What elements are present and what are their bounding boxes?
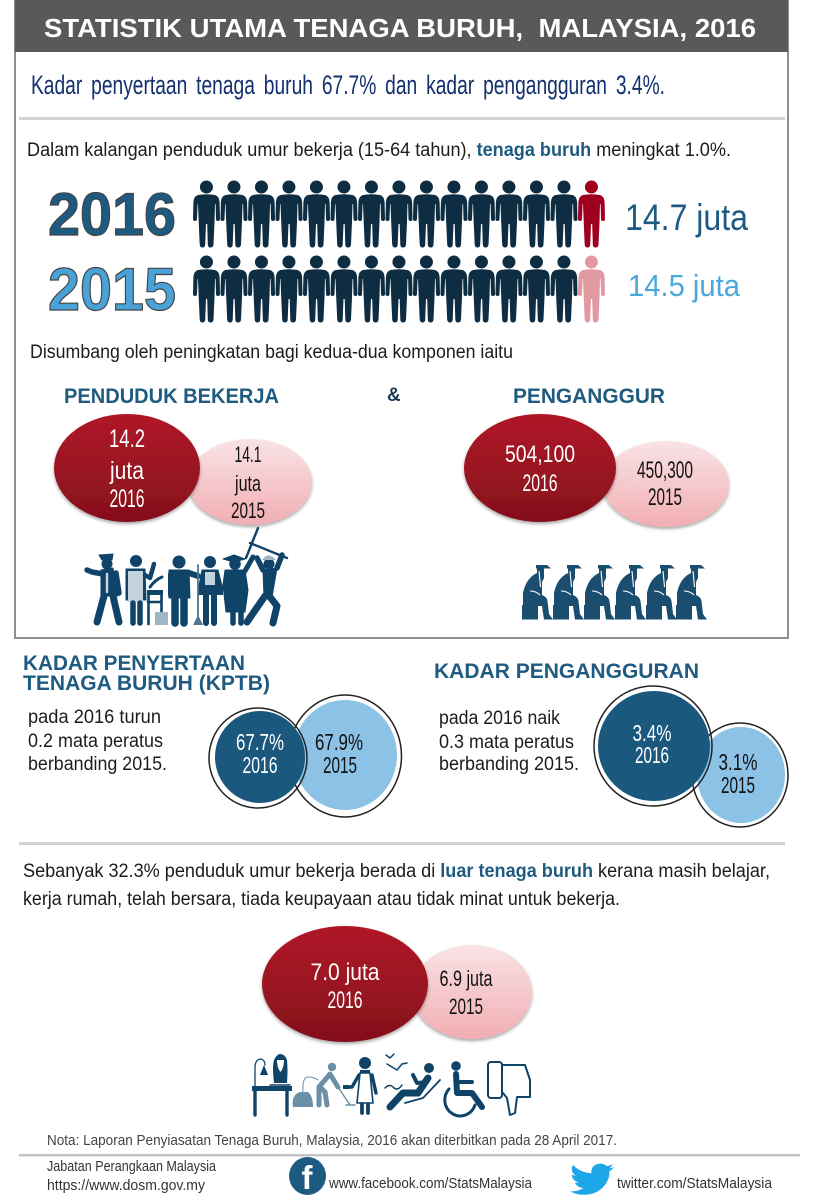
footer: department	[47, 1158, 217, 1194]
circles: KPTB: 67.7%	[236, 729, 284, 755]
stand with briefcase	[147, 577, 168, 625]
circles: KPTB: 67.9%	[315, 729, 363, 755]
text: unemployment change: pada 2016 naik	[439, 708, 560, 729]
title bar: STATISTIK UTAMA TENAGA BURUH, MALAYSIA, 2016	[44, 13, 756, 43]
worker: apron	[126, 555, 154, 623]
components intro text: Disumbang oleh peningkatan bagi kedua-dua komponen iaitu	[30, 342, 513, 363]
icon: reasons outside labour force	[252, 1054, 530, 1116]
title bar	[15, 0, 788, 52]
text: outside labour force: Sebanyak 32.3% penduduk umur bekerja berada di luar tenaga buruh kerana masih belajar,	[23, 861, 770, 882]
text: unemployment change: 0.3 mata peratus	[439, 732, 574, 753]
bubbles: penganggur: 504,100	[505, 441, 575, 468]
text: KPTB change	[28, 707, 167, 775]
bubbles: penganggur: 2016	[522, 470, 558, 497]
circles: unemployment: 2016	[635, 742, 669, 768]
circles: unemployment: 3.4%	[632, 720, 672, 746]
bubbles: penganggur	[464, 414, 729, 527]
pictogram row 2015	[193, 255, 605, 322]
year label 2016: 2016	[48, 181, 176, 248]
bubbles: penganggur: 450,300	[637, 457, 693, 484]
circles: KPTB: 2016	[242, 752, 278, 778]
footer: facebook link: www.facebook.com/StatsMalaysia	[328, 1175, 533, 1192]
icon: birds and reclining retiree	[385, 1054, 440, 1107]
text: KPTB change: pada 2016 turun	[28, 707, 161, 728]
heading: kadar pengangguran: KADAR PENGANGGURAN	[434, 660, 699, 683]
bubbles: outside labour force: 7.0 juta	[310, 959, 380, 986]
footer: twitter link: twitter.com/StatsMalaysia	[617, 1175, 773, 1192]
worker: man	[169, 556, 198, 623]
year label 2015: 2015	[48, 256, 176, 323]
text: outside labour force: kerja rumah, telah bersara, tiada keupayaan atau tidak minat untuk bekerja.	[23, 889, 620, 910]
bubbles: penduduk bekerja	[54, 414, 312, 525]
bubbles: penduduk bekerja: 2015	[231, 498, 265, 523]
icon: studying at desk	[252, 1054, 292, 1115]
icon: thumbs down	[488, 1062, 530, 1115]
labour force intro text: Dalam kalangan penduduk umur bekerja (15-64 tahun), tenaga buruh meningkat 1.0%.	[27, 140, 731, 161]
bubbles: penduduk bekerja: 2016	[110, 485, 144, 513]
text: unemployment change: berbanding 2015.	[439, 754, 579, 775]
bubbles: penduduk bekerja: 14.1	[234, 442, 262, 467]
icon: facebook	[289, 1157, 326, 1196]
text: unemployment change	[439, 708, 579, 775]
worker: graduate	[223, 555, 253, 623]
bubbles: penduduk bekerja: juta	[234, 471, 262, 496]
heading: penduduk bekerja: PENDUDUK BEKERJA	[64, 385, 279, 408]
bubbles: penduduk bekerja: 14.2	[109, 425, 145, 453]
text: outside labour force	[23, 861, 770, 910]
heading: KPTB: TENAGA BURUH (KPTB)	[23, 672, 270, 695]
heading: penganggur: PENGANGGUR	[513, 385, 665, 408]
value 14.5 juta: 14.5 juta	[628, 268, 741, 303]
circles: KPTB	[209, 695, 402, 817]
circles: KPTB: 2015	[323, 752, 357, 778]
worker: pilot	[87, 554, 119, 622]
circles: unemployment: 2015	[721, 772, 755, 798]
bubbles: outside labour force: 2015	[449, 994, 483, 1019]
bubbles: penduduk bekerja: juta	[109, 457, 144, 485]
icon: workers	[87, 528, 287, 625]
bubbles: outside labour force	[262, 926, 532, 1042]
note: Nota: Laporan Penyiasatan Tenaga Buruh, Malaysia, 2016 akan diterbitkan pada 28 April 2017.	[47, 1132, 617, 1149]
text: KPTB change: berbanding 2015.	[28, 754, 167, 775]
circles: unemployment	[594, 686, 788, 827]
icon: facebook: f	[302, 1159, 314, 1196]
icon: seated unemployed figures	[522, 565, 707, 620]
ampersand: &	[387, 385, 401, 406]
bubbles: outside labour force: 2016	[328, 987, 362, 1014]
icon: wheelchair user	[445, 1061, 482, 1116]
bubbles: outside labour force: 6.9 juta	[440, 966, 493, 991]
footer: department: https://www.dosm.gov.my	[47, 1177, 205, 1194]
value 14.7 juta: 14.7 juta	[625, 197, 748, 238]
footer: department: Jabatan Perangkaan Malaysia	[47, 1158, 217, 1175]
heading: KPTB: KADAR PENYERTAAN	[23, 652, 245, 675]
icon: vacuuming	[293, 1063, 355, 1107]
pictogram row 2016	[193, 180, 605, 248]
bubbles: penganggur: 2015	[648, 484, 682, 511]
icon: twitter	[570, 1164, 614, 1195]
text: KPTB change: 0.2 mata peratus	[28, 731, 163, 752]
circles: unemployment: 3.1%	[718, 749, 758, 775]
worker: maid	[193, 556, 223, 625]
worker: pickaxe digger	[246, 528, 287, 623]
heading: KPTB	[23, 652, 270, 695]
icon: housekeeper	[343, 1057, 376, 1113]
panel: main frame	[15, 0, 788, 638]
